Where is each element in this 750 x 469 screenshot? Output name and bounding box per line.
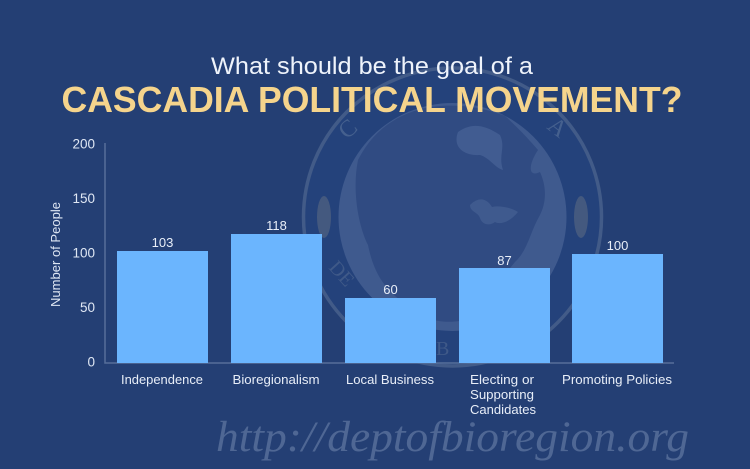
bar: Promoting Policies 100: [572, 238, 663, 363]
category labels: Local Business: [346, 372, 434, 387]
bar: Promoting Policies 100: 100: [607, 238, 628, 253]
watermark: seal lettering top left: C: [334, 114, 363, 144]
title line two: CASCADIA POLITICAL MOVEMENT?: [62, 79, 682, 120]
watermark: dark land mass on globe: [356, 106, 545, 322]
bar chart: [48, 136, 674, 417]
y axis label: Number of People: [48, 202, 63, 307]
title line one: What should be the goal of a: [211, 53, 534, 80]
bar: Local Business 60: 60: [383, 282, 398, 297]
y axis ticks: 0: [87, 354, 95, 370]
bar: Electing 87: 87: [497, 253, 512, 268]
bar: Bioregionalism 118: [231, 218, 322, 363]
bar: Independence 103: [117, 235, 208, 363]
watermark url: http://deptofbioregion.org: [216, 414, 689, 461]
watermark: Great Lakes: [470, 199, 518, 224]
axes: [105, 143, 674, 363]
y axis ticks: [72, 136, 95, 370]
category labels: Promoting Policies: [562, 372, 673, 387]
bar: Independence 103: 103: [152, 235, 173, 250]
category labels: Independence: [121, 372, 203, 387]
category labels: Electing or: [470, 372, 535, 387]
y axis ticks: 100: [72, 246, 95, 260]
watermark: Hudson Bay light patch: [457, 126, 503, 170]
bar: Electing 87: [459, 253, 550, 363]
bar: Bioregionalism 118: 118: [266, 218, 287, 233]
watermark: seal lettering lower left: DE: [324, 257, 358, 291]
y axis ticks: 200: [72, 136, 95, 152]
bar: Local Business 60: [345, 282, 436, 363]
watermark: seal lettering bottom: B: [436, 338, 449, 360]
category labels: [121, 372, 673, 417]
watermark: Cascadia seal: [304, 68, 602, 366]
watermark: seal lettering top right: A: [542, 112, 572, 144]
title: [62, 53, 682, 120]
y axis ticks: 50: [80, 300, 95, 315]
category labels: Supporting: [470, 387, 534, 402]
y axis ticks: 150: [72, 191, 95, 206]
category labels: Bioregionalism: [232, 372, 320, 387]
category labels: Candidates: [470, 402, 536, 417]
watermark: right wheat ornament: [574, 196, 588, 238]
watermark: left wheat ornament: [317, 196, 331, 238]
